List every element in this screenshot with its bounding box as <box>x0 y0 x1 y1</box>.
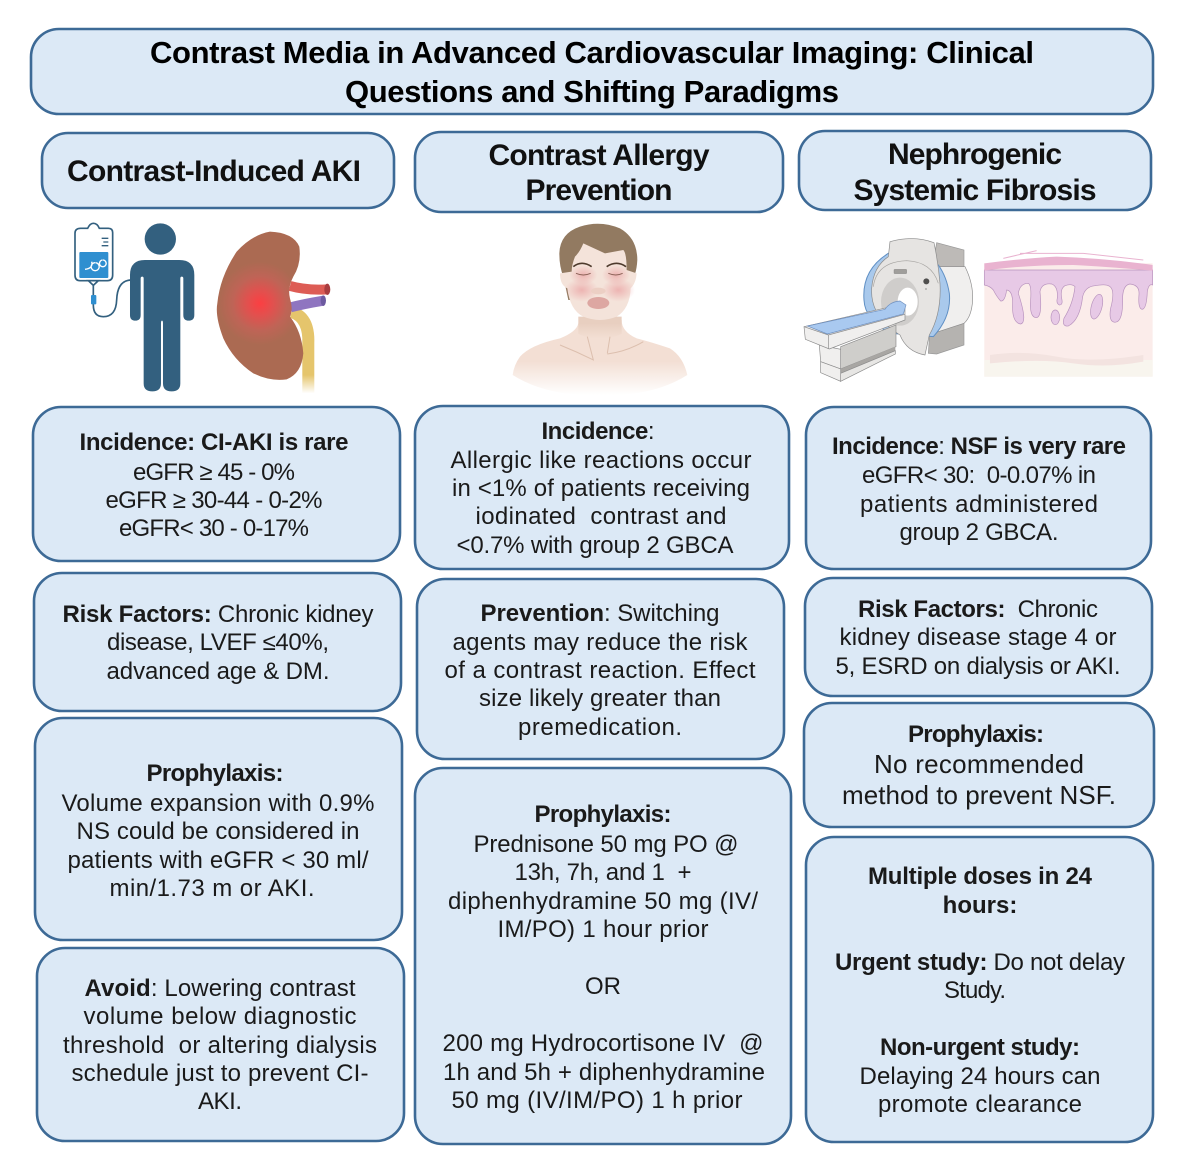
panel: allergy prophylaxis <box>415 768 791 1144</box>
panel: NSF prophylaxis <box>804 703 1154 827</box>
panel: CI-AKI avoid: AKI. <box>198 1088 242 1115</box>
panel: allergy incidence: iodinated contrast and <box>476 503 726 530</box>
panel: NSF incidence <box>806 407 1151 569</box>
panel: allergy prevention: size likely greater than <box>479 685 721 712</box>
panel: NSF multiple doses: hours: <box>943 892 1017 919</box>
panel: NSF multiple doses: Study. <box>944 977 1006 1004</box>
panel: NSF multiple doses: Non-urgent study: <box>880 1034 1080 1061</box>
panel: CI-AKI avoid: volume below diagnostic <box>84 1003 356 1030</box>
panel: CI-AKI incidence <box>33 407 400 561</box>
panel: allergy prevention: Prevention: Switching <box>480 600 720 627</box>
panel: allergy prevention: of a contrast reaction. Effect <box>444 657 756 684</box>
panel: allergy prophylaxis: diphenhydramine 50 mg (IV/ <box>448 888 758 915</box>
panel: NSF incidence: patients administered <box>860 491 1098 518</box>
panel: allergy prevention: agents may reduce the risk <box>452 629 748 656</box>
panel: NSF risk factors: 5, ESRD on dialysis or AKI. <box>836 653 1120 680</box>
panel: allergy prophylaxis: IM/PO) 1 hour prior <box>498 916 708 943</box>
panel: NSF prophylaxis: No recommended <box>874 749 1084 779</box>
heading: Contrast-Induced AKI <box>42 133 394 208</box>
panel: NSF risk factors: kidney disease stage 4 or <box>840 624 1116 651</box>
panel: NSF incidence: Incidence: NSF is very rare <box>832 433 1126 460</box>
panel: NSF multiple doses: Multiple doses in 24 <box>868 863 1093 890</box>
panel: allergy prophylaxis: OR <box>585 973 621 1000</box>
panel: NSF prophylaxis: method to prevent NSF. <box>842 780 1116 810</box>
panel: CI-AKI prophylaxis: min/1.73 m or AKI. <box>110 875 314 902</box>
panel: NSF multiple doses: promote clearance <box>878 1091 1082 1118</box>
panel: allergy incidence: Incidence: <box>542 418 654 445</box>
panel: NSF incidence: eGFR< 30: 0-0.07% in <box>862 462 1096 489</box>
panel: CI-AKI prophylaxis: Volume expansion with 0.9% <box>62 790 374 817</box>
title: Questions and Shifting Paradigms <box>345 74 839 109</box>
heading: Contrast Allergy Prevention <box>415 132 783 212</box>
panel: allergy incidence: in <1% of patients receiving <box>452 475 750 502</box>
panel: CI-AKI prophylaxis: NS could be considered in <box>76 818 360 845</box>
panel: CI-AKI avoid <box>37 948 404 1141</box>
panel: allergy incidence: <0.7% with group 2 GBCA <box>456 532 734 559</box>
icon: face with allergic reaction <box>513 224 687 395</box>
heading: Contrast Allergy Prevention: Prevention <box>526 174 672 207</box>
icon: MRI scanner <box>804 239 973 381</box>
panel: CI-AKI avoid: Avoid: Lowering contrast <box>84 975 356 1002</box>
panel: allergy prophylaxis: 1h and 5h + diphenhydramine <box>443 1059 765 1086</box>
icon: IV bag connected to patient <box>75 223 131 317</box>
panel: allergy prophylaxis: Prophylaxis: <box>534 801 672 828</box>
panel: allergy prophylaxis: 13h, 7h, and 1 + <box>514 859 692 886</box>
heading: Contrast-Induced AKI: Contrast-Induced AKI <box>67 155 361 188</box>
panel: CI-AKI incidence: Incidence: CI-AKI is rare <box>80 429 348 456</box>
panel: NSF prophylaxis: Prophylaxis: <box>908 721 1044 748</box>
panel: NSF multiple doses <box>806 837 1153 1142</box>
panel: NSF risk factors <box>805 578 1152 696</box>
panel: CI-AKI risk factors: Risk Factors: Chronic kidney <box>62 601 374 628</box>
panel: CI-AKI incidence: eGFR< 30 - 0-17% <box>119 515 309 542</box>
heading: Nephrogenic Systemic Fibrosis: Nephrogenic <box>888 138 1062 171</box>
panel: NSF multiple doses: Delaying 24 hours can <box>860 1063 1100 1090</box>
panel: allergy prevention: premedication. <box>518 714 682 741</box>
icon: skin cross-section <box>984 251 1153 377</box>
panel: NSF incidence: group 2 GBCA. <box>900 519 1058 546</box>
title <box>31 29 1153 114</box>
panel: allergy prevention <box>417 579 784 759</box>
heading: Nephrogenic Systemic Fibrosis: Systemic Fibrosis <box>854 174 1096 207</box>
panel: CI-AKI avoid: threshold or altering dialysis <box>63 1032 377 1059</box>
panel: CI-AKI risk factors <box>34 573 401 711</box>
panel: allergy prophylaxis: Prednisone 50 mg PO @ <box>474 831 738 858</box>
heading: Contrast Allergy Prevention: Contrast Allergy <box>488 139 710 172</box>
title: Contrast Media in Advanced Cardiovascular Imaging: Clinical <box>150 35 1034 70</box>
panel: CI-AKI prophylaxis: patients with eGFR < 30 ml/ <box>68 847 369 874</box>
panel: CI-AKI risk factors: disease, LVEF ≤40%, <box>107 629 329 656</box>
panel: CI-AKI prophylaxis <box>35 718 402 940</box>
icon: person silhouette <box>130 223 194 391</box>
panel: allergy prophylaxis: 50 mg (IV/IM/PO) 1 h prior <box>452 1087 742 1114</box>
icon: kidney with inflammation <box>217 232 330 393</box>
panel: CI-AKI incidence: eGFR ≥ 45 - 0% <box>133 459 295 486</box>
panel: CI-AKI avoid: schedule just to prevent CI- <box>72 1060 368 1087</box>
panel: CI-AKI incidence: eGFR ≥ 30-44 - 0-2% <box>106 487 322 514</box>
panel: CI-AKI prophylaxis: Prophylaxis: <box>146 760 284 787</box>
panel: allergy incidence <box>415 406 789 569</box>
panel: allergy prophylaxis: 200 mg Hydrocortisone IV @ <box>442 1030 764 1057</box>
panel: CI-AKI risk factors: advanced age & DM. <box>106 658 330 685</box>
heading: Nephrogenic Systemic Fibrosis <box>799 131 1151 210</box>
panel: NSF multiple doses: Urgent study: Do not delay <box>835 949 1125 976</box>
panel: NSF risk factors: Risk Factors: Chronic <box>858 596 1098 623</box>
panel: allergy incidence: Allergic like reactions occur <box>450 447 752 474</box>
